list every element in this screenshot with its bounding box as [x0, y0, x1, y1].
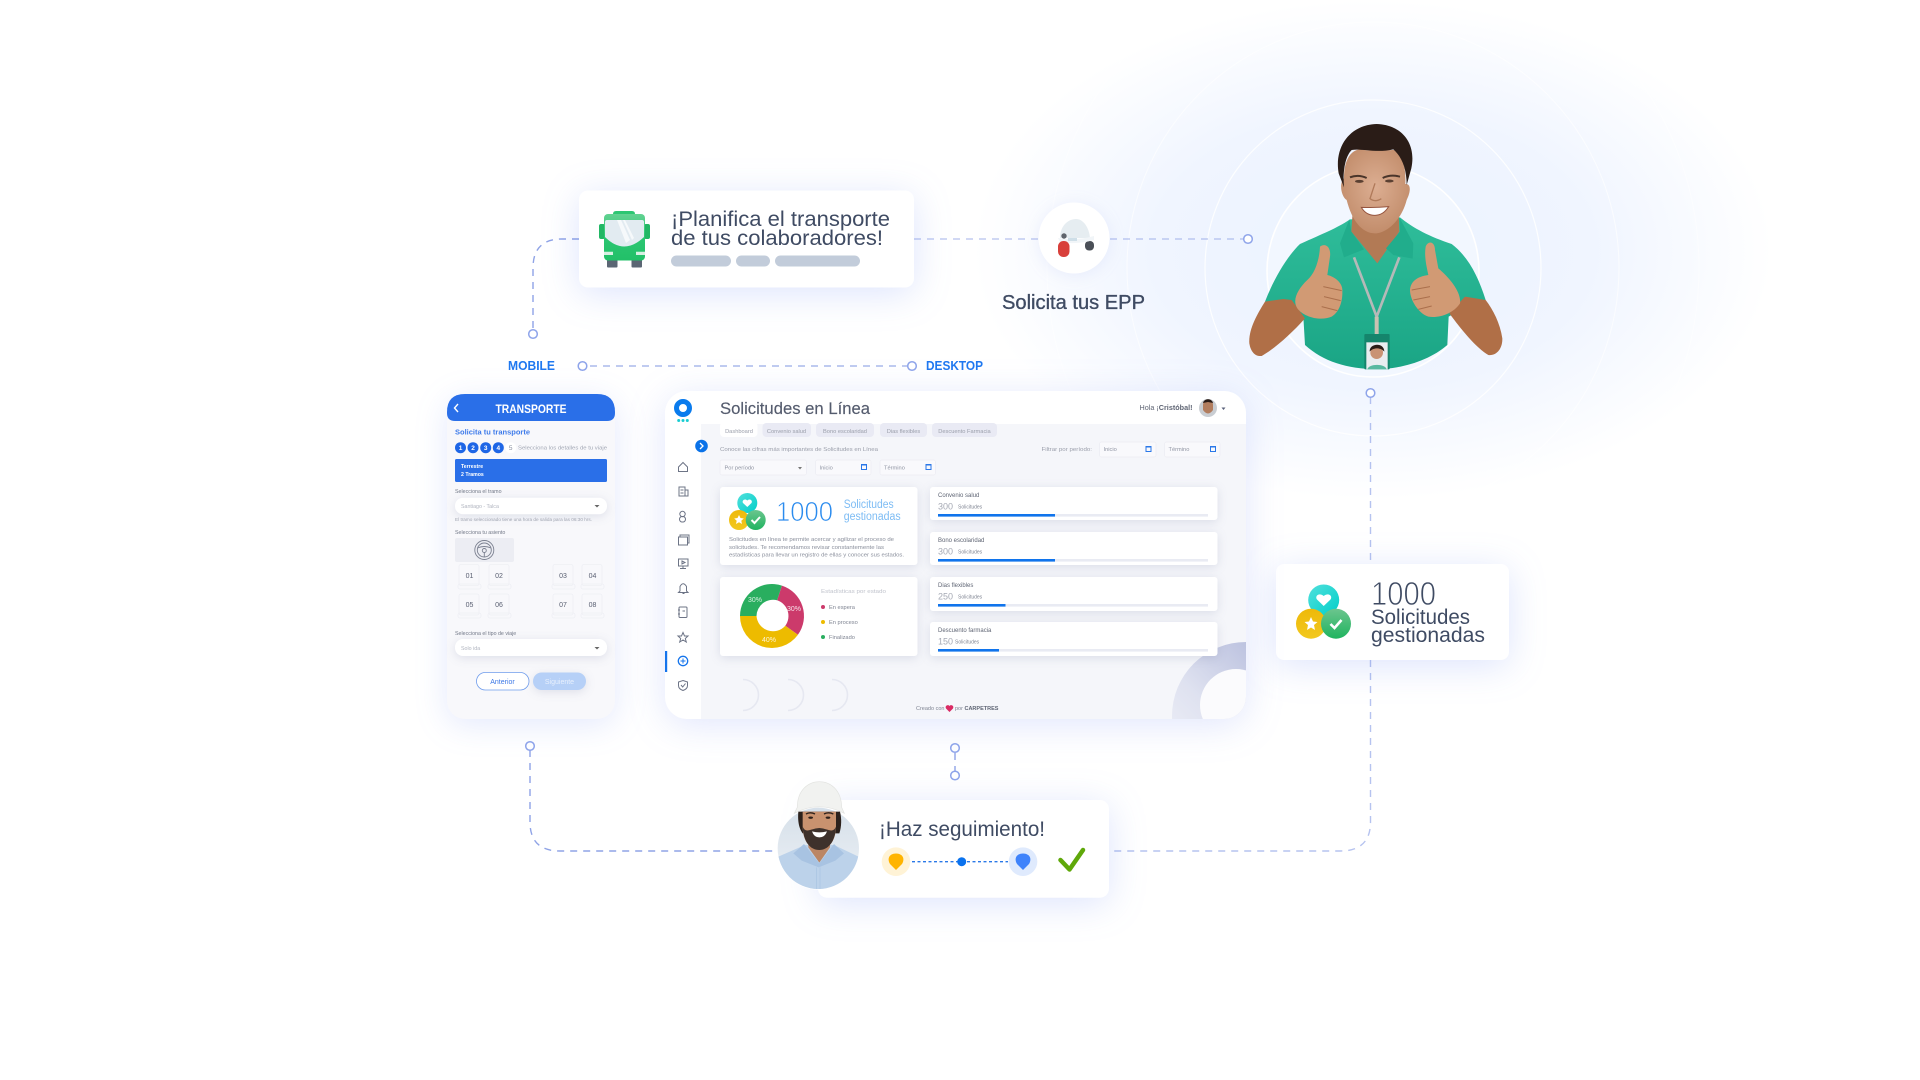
legend: Estadísticas por estado	[821, 589, 886, 595]
legend	[821, 589, 886, 641]
card: estadísticas por estado	[720, 577, 918, 656]
card: dias flexibles: 250	[938, 592, 953, 602]
seat selector: 05	[466, 602, 473, 609]
EPP label: Solicita tus EPP	[1002, 291, 1145, 314]
phone header: TRANSPORTE	[496, 404, 567, 416]
description: solicitudes. Te recomendamos revisar constantemente las	[729, 545, 884, 551]
top bar	[665, 391, 1246, 424]
route select	[455, 489, 607, 522]
card: descuento farmacia	[930, 622, 1218, 656]
seat selector	[455, 530, 604, 618]
donut chart: 30%	[787, 606, 801, 613]
footer credit: Creado con	[916, 706, 944, 712]
card: convenio salud	[930, 487, 1218, 520]
seat selector: 02	[495, 573, 503, 580]
person with thumbs up	[1249, 124, 1502, 369]
finger lines	[1322, 287, 1432, 311]
card: descuento farmacia: Descuento farmacia	[938, 628, 992, 634]
card: convenio salud: Solicitudes	[958, 504, 983, 510]
hard hat	[794, 782, 844, 813]
description	[729, 537, 904, 558]
selected route	[455, 459, 607, 482]
sidebar icons	[678, 462, 689, 690]
eyebrows and eyes	[1350, 176, 1400, 178]
filters: Inicio	[820, 466, 833, 472]
decorative ghost arcs	[743, 680, 848, 710]
icon: helmet with ear muffs	[1058, 219, 1094, 257]
decorative corner circles	[1172, 642, 1246, 719]
panel: phone	[447, 394, 615, 719]
caption: gestionadas	[844, 511, 901, 523]
seat selector: 06	[495, 602, 503, 609]
beard	[803, 827, 836, 850]
caption	[1371, 606, 1485, 647]
legend: En espera	[829, 605, 856, 611]
steps	[455, 442, 607, 453]
face	[1341, 149, 1410, 233]
footer credit	[916, 705, 999, 712]
steps: 4	[496, 445, 500, 452]
heading text: de tus colaboradores!	[671, 227, 883, 250]
icon: steering wheel	[475, 540, 494, 560]
steps: 2	[471, 445, 475, 452]
filters: Por período	[724, 466, 754, 472]
card: descuento farmacia: Solicitudes	[955, 640, 980, 646]
trip type select: Selecciona el tipo de viaje	[455, 631, 516, 637]
sidebar	[665, 424, 701, 719]
seat selector: 07	[559, 602, 567, 609]
figure: 1000	[776, 496, 833, 527]
filters	[720, 442, 1220, 475]
heading text: ¡Planifica el transporte	[671, 208, 890, 231]
left arm	[1249, 299, 1305, 356]
phone subtitle: Solicita tu transporte	[455, 428, 530, 436]
nose	[1370, 183, 1381, 201]
filters: Inicio	[1104, 447, 1117, 453]
smile	[812, 831, 827, 837]
icon: green bus	[599, 211, 650, 268]
filters: Término	[884, 466, 905, 472]
hair sides	[798, 812, 841, 833]
caption: Solicitudes	[844, 499, 894, 511]
worker portrait	[777, 782, 860, 890]
donut chart	[740, 584, 804, 648]
open collar	[793, 844, 844, 867]
route select: Selecciona el tramo	[455, 489, 502, 495]
card: bono escolaridad: Bono escolaridad	[938, 538, 984, 544]
icon: origin pin	[882, 847, 910, 876]
heading: ¡Haz seguimiento!	[879, 818, 1045, 841]
lanyard	[1354, 257, 1399, 317]
hair	[1338, 124, 1412, 187]
icon: destination pin	[1009, 847, 1037, 876]
card: bono escolaridad: Solicitudes	[958, 550, 983, 556]
legend: En proceso	[829, 620, 858, 626]
steps: 5	[509, 445, 513, 452]
stats card: 1000 solicitudes gestionadas	[1276, 564, 1509, 660]
description: estadísticas para llevar un registro de ellas y conocer sus estados.	[729, 552, 904, 558]
trip type select: Solo ida	[461, 646, 480, 652]
card: dias flexibles: Dias flexibles	[938, 583, 973, 589]
selected route: Terrestre	[461, 464, 483, 470]
seat selector: Selecciona tu asiento	[455, 530, 505, 536]
icon: three badges small	[729, 493, 766, 530]
card: bono escolaridad: 300	[938, 546, 953, 556]
card: bono escolaridad	[930, 532, 1218, 565]
steps: Selecciona los detalles de tu viaje	[518, 446, 607, 452]
neck	[1351, 212, 1399, 263]
blue shirt	[777, 845, 860, 890]
donut chart: 30%	[748, 597, 762, 604]
eyes	[806, 813, 833, 819]
user greeting: Hola ¡Cristóbal!	[1140, 405, 1192, 412]
trip type select	[455, 631, 607, 656]
icon: check mark	[1060, 850, 1083, 870]
footer credit: por CARPETRES	[955, 706, 999, 712]
tabs	[720, 422, 997, 437]
heading text	[671, 208, 890, 250]
description: Solicitudes en línea te permite acercar y agilizar el proceso de	[729, 537, 894, 543]
background glow with concentric rings	[973, 0, 1773, 594]
user greeting	[1140, 399, 1226, 417]
tabs: Convenio salud	[767, 429, 806, 435]
filters: Término	[1168, 447, 1189, 453]
steps: 3	[484, 445, 488, 452]
sidebar expand button	[695, 440, 708, 452]
button: Anterior: Anterior	[490, 679, 515, 686]
dashboard title: Solicitudes en Línea	[720, 400, 871, 418]
connector lines	[526, 235, 1375, 851]
card: descuento farmacia: 150	[938, 636, 953, 646]
button: Siguiente: Siguiente	[545, 679, 574, 686]
icon: three badges	[1296, 584, 1351, 639]
legend: Finalizado	[829, 635, 855, 641]
card: haz seguimiento	[777, 782, 1109, 898]
tabs: Descuento Farmacia	[938, 429, 992, 435]
EPP badge	[1038, 202, 1110, 274]
tabs: Dashboard	[725, 429, 753, 435]
collar	[1340, 217, 1413, 259]
card: planifica el transporte	[579, 190, 914, 288]
label: DESKTOP: DESKTOP	[926, 358, 983, 373]
progress dot	[957, 857, 966, 866]
subtitle: Conoce las cifras más importantes de Solicitudes en Línea	[720, 447, 879, 453]
right arm	[1449, 297, 1502, 355]
caption	[844, 499, 901, 523]
caption: gestionadas	[1371, 624, 1485, 647]
tracking line	[882, 847, 1083, 876]
active marker	[664, 651, 667, 672]
card: convenio salud: 300	[938, 502, 953, 512]
left fist	[1295, 245, 1342, 319]
card: dias flexibles: Solicitudes	[958, 594, 983, 600]
right fist	[1410, 243, 1460, 317]
label: MOBILE: MOBILE	[508, 358, 555, 373]
card: convenio salud: Convenio salud	[938, 493, 979, 499]
seat selector: 03	[559, 573, 567, 580]
placeholder pills	[671, 256, 860, 266]
seat selector: 04	[589, 573, 596, 580]
button: Anterior	[476, 672, 529, 690]
button: Siguiente	[533, 672, 586, 690]
route select: El tramo seleccionado tiene una hora de salida para las 06:30 hrs.	[455, 517, 592, 522]
logo	[676, 402, 690, 422]
selected route: 2 Tramos	[461, 472, 484, 478]
steps: 1	[459, 445, 463, 452]
filters: Filtrar por período:	[1042, 447, 1092, 453]
card: dias flexibles	[930, 577, 1218, 611]
seat selector: 08	[589, 602, 596, 609]
caption: Solicitudes	[1371, 606, 1470, 629]
panel: desktop dashboard	[654, 386, 1257, 736]
phone header	[447, 394, 615, 421]
tabs: Dias flexibles	[887, 429, 920, 435]
route select: Santiago - Talca	[461, 504, 499, 510]
worker face	[803, 812, 836, 849]
tabs: Bono escolaridad	[823, 429, 867, 435]
seat selector: 01	[466, 573, 473, 580]
smile	[1361, 207, 1389, 215]
donut chart: 40%	[762, 637, 776, 644]
card: 1000 solicitudes	[720, 487, 918, 565]
torso and sleeves	[1265, 217, 1486, 369]
figure: 1000	[1371, 575, 1436, 612]
